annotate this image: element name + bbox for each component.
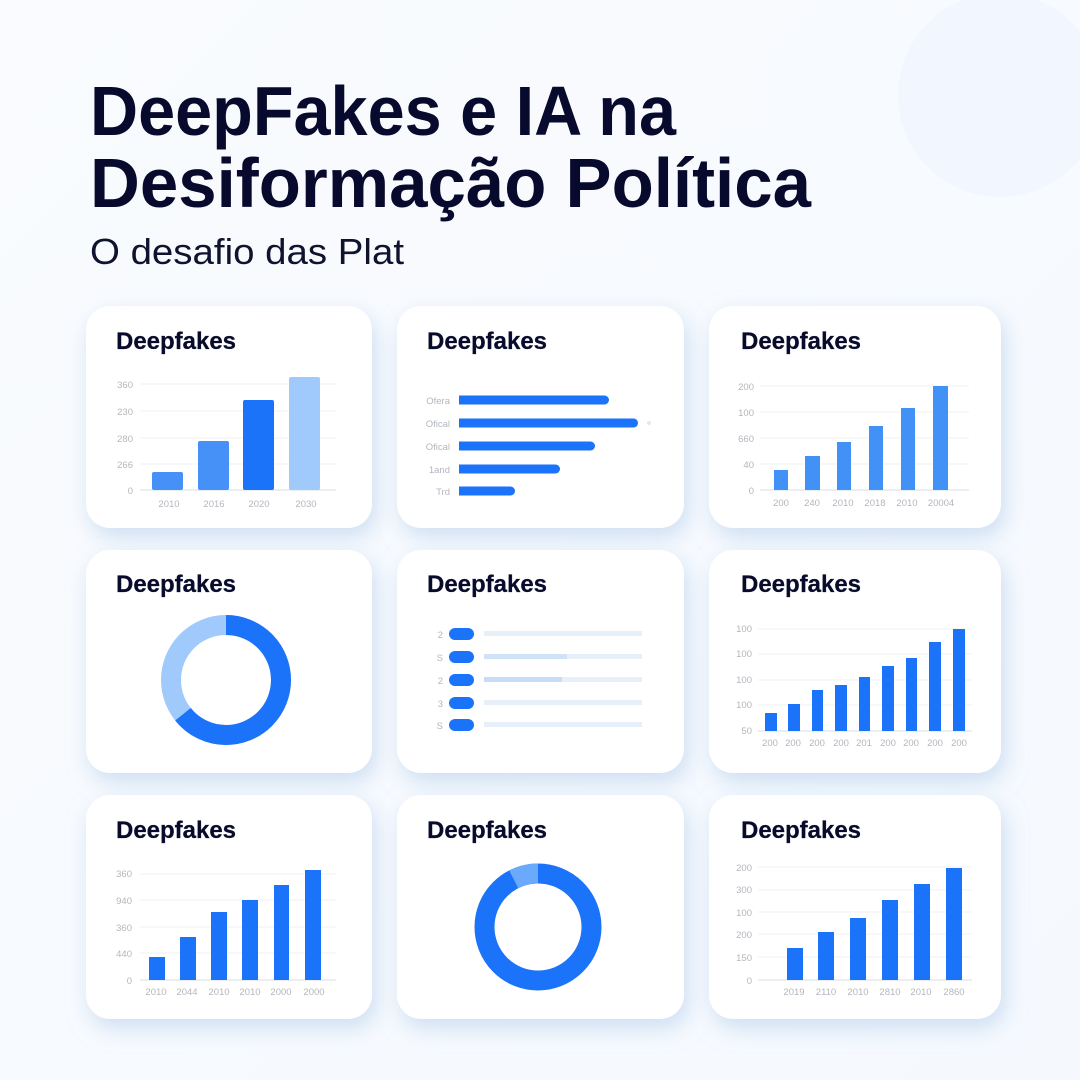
panel: column chart, four bars: Deepfakes — [116, 328, 236, 355]
panel: column chart, six bars, lower left: 360 — [116, 923, 132, 934]
panel: column chart, six bars, lower left: 2010 — [239, 987, 261, 998]
panel: column chart, six bars: 40 — [743, 460, 754, 471]
panel: progress list: Deepfakes — [427, 571, 547, 598]
panel: column chart, six bars: 100 — [738, 408, 754, 419]
panel: column chart, nine bars: 100 — [736, 675, 752, 686]
panel: column chart, nine bars: Deepfakes — [741, 571, 861, 598]
panel: column chart, four bars: 266 — [117, 460, 133, 471]
panel: column chart, nine bars: 50 — [741, 726, 752, 737]
panel: column chart, six bars, lower left — [86, 795, 372, 1019]
panel: column chart, six bars, lower right: 2010 — [910, 987, 932, 998]
panel: column chart, six bars: 660 — [738, 434, 754, 445]
panel: column chart, six bars, lower left: 2010 — [208, 987, 230, 998]
panel: column chart, six bars, lower right: 2019 — [783, 987, 805, 998]
panel: column chart, six bars, lower right: 300 — [736, 885, 752, 896]
panel: column chart, nine bars: 200 — [903, 738, 919, 749]
decorative circle — [898, 0, 1080, 197]
panel: column chart, nine bars: 201 — [856, 738, 872, 749]
panel: column chart, six bars, lower right: Deepfakes — [741, 817, 861, 844]
panel: progress list — [397, 550, 684, 773]
panel: column chart, six bars, lower left: 2010 — [145, 987, 167, 998]
panel: column chart, six bars, lower left: 2044 — [176, 987, 198, 998]
panel: column chart, six bars, lower right — [709, 795, 1001, 1019]
panel: donut chart, 64 percent: Deepfakes — [116, 571, 236, 598]
panel: column chart, six bars, lower left: 940 — [116, 896, 132, 907]
panel: column chart, nine bars: 200 — [809, 738, 825, 749]
panel: column chart, six bars, lower left: 360 — [116, 869, 132, 880]
panel: column chart, six bars: 200 — [773, 498, 789, 509]
panel: column chart, nine bars: 100 — [736, 649, 752, 660]
panel: column chart, six bars, lower left: 2000 — [270, 987, 292, 998]
panel: column chart, six bars, lower right: 2810 — [879, 987, 901, 998]
panel: column chart, six bars, lower right: 200 — [736, 863, 752, 874]
panel: column chart, six bars, lower left: 440 — [116, 949, 132, 960]
panel: horizontal bars: Ofera — [426, 396, 451, 407]
panel: donut chart, 92 percent — [397, 795, 684, 1019]
panel: column chart, nine bars — [709, 550, 1001, 773]
panel: column chart, nine bars: 200 — [762, 738, 778, 749]
panel: column chart, nine bars: 200 — [927, 738, 943, 749]
panel: column chart, nine bars: 200 — [951, 738, 967, 749]
panel: column chart, six bars, lower right: 200 — [736, 930, 752, 941]
panel: donut chart, 92 percent: Deepfakes — [427, 817, 547, 844]
panel: column chart, nine bars: 100 — [736, 624, 752, 635]
panel: column chart, four bars: 2030 — [295, 499, 317, 510]
panel: column chart, six bars: 2010 — [896, 498, 918, 509]
panel: column chart, six bars: 200 — [738, 382, 754, 393]
panel: progress list: S — [437, 721, 443, 732]
panel: column chart, six bars: Deepfakes — [741, 328, 861, 355]
panel: column chart, nine bars: 200 — [785, 738, 801, 749]
panel: column chart, six bars, lower right: 150 — [736, 953, 752, 964]
panel: column chart, four bars: 360 — [117, 380, 133, 391]
panel: column chart, six bars: 240 — [804, 498, 820, 509]
panel: column chart, four bars: 280 — [117, 434, 133, 445]
panel: column chart, four bars: 230 — [117, 407, 133, 418]
panel: column chart, six bars, lower right: 100 — [736, 908, 752, 919]
panel: column chart, six bars, lower right: 2110 — [816, 987, 836, 998]
panel: progress list: 2 — [438, 630, 443, 641]
panel: horizontal bars: Deepfakes — [427, 328, 547, 355]
panel: column chart, nine bars: 200 — [833, 738, 849, 749]
panel: horizontal bars: Ofical — [426, 442, 450, 453]
panel: column chart, six bars, lower left: 2000 — [303, 987, 325, 998]
panel: column chart, six bars — [709, 306, 1001, 528]
panel: column chart, nine bars: 100 — [736, 700, 752, 711]
panel: column chart, four bars: 2016 — [203, 499, 225, 510]
panel: horizontal bars — [397, 306, 684, 528]
panel: column chart, six bars: 2018 — [864, 498, 886, 509]
panel: progress list: 3 — [438, 699, 443, 710]
panel: progress list: S — [437, 653, 443, 664]
panel: horizontal bars: 1and — [429, 465, 450, 476]
panel: column chart, six bars, lower right: 2010 — [847, 987, 869, 998]
panel: column chart, six bars: 2010 — [832, 498, 854, 509]
panel: column chart, four bars: 2020 — [248, 499, 270, 510]
panel: column chart, six bars: 0 — [749, 486, 754, 497]
panel: column chart, six bars, lower left: Deepfakes — [116, 817, 236, 844]
panel: column chart, nine bars: 200 — [880, 738, 896, 749]
panel: column chart, six bars: 20004 — [928, 498, 954, 509]
panel: donut chart, 64 percent — [86, 550, 372, 773]
title: DeepFakes e IA na — [90, 72, 677, 150]
subtitle: O desafio das Plat — [90, 231, 404, 272]
panel: column chart, four bars: 0 — [128, 486, 133, 497]
panel: horizontal bars: Ofical — [426, 419, 450, 430]
title — [90, 72, 812, 222]
panel: column chart, six bars, lower right: 2860 — [943, 987, 965, 998]
panel: column chart, six bars, lower left: 0 — [127, 976, 132, 987]
panel: column chart, six bars, lower right: 0 — [747, 976, 752, 987]
panel: horizontal bars: Trd — [436, 487, 450, 498]
panel: progress list: 2 — [438, 676, 443, 687]
panel: column chart, four bars: 2010 — [158, 499, 180, 510]
panel: column chart, four bars — [86, 306, 372, 528]
title: Desiformação Política — [90, 144, 812, 222]
